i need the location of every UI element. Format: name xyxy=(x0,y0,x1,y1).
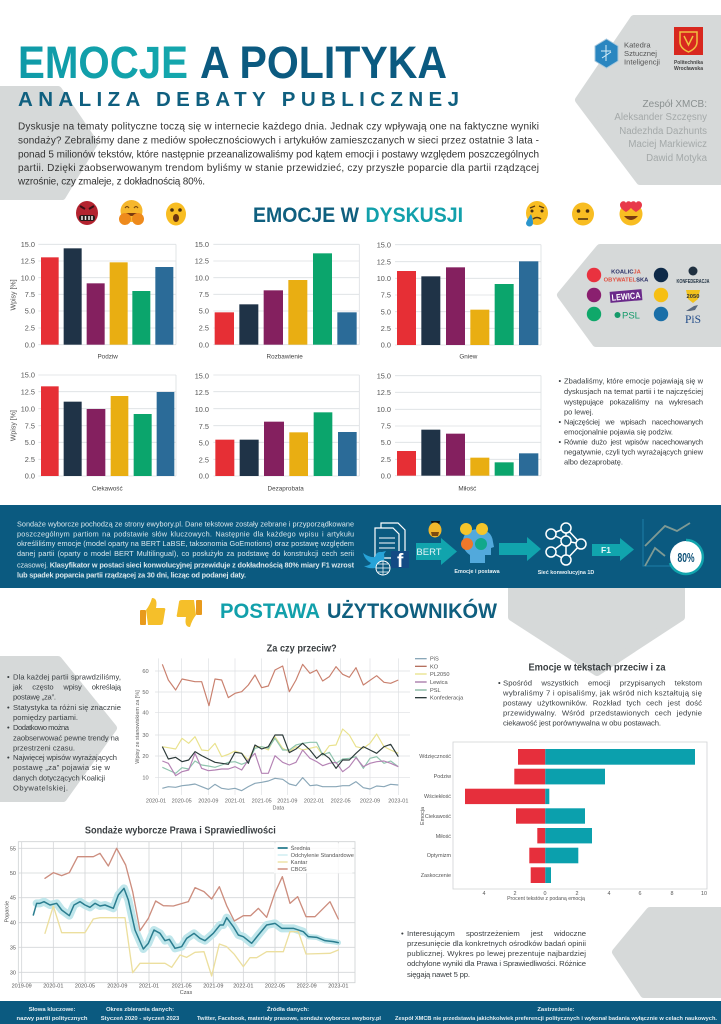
footer: sources xyxy=(197,1005,381,1022)
chart legend: Lewica xyxy=(430,680,448,686)
bar chart: emocje przeciw i za: Emocja xyxy=(420,807,426,825)
text: bullets on attitude: Dodatkowo można xyxy=(13,723,70,732)
arrow: to network xyxy=(499,537,541,561)
bar chart: Podziw: 5.0 xyxy=(25,307,35,316)
title: EMOCJE xyxy=(18,37,188,88)
text: bullets on emotions: • xyxy=(558,377,562,386)
bar chart: emocje przeciw i za: Podziw xyxy=(434,774,451,780)
bar chart: Ciekawość: Wpisy [%] xyxy=(10,410,17,441)
line chart: Za czy przeciw: 20 xyxy=(142,754,149,760)
line chart: sondaze PiS: 2023-01 xyxy=(328,984,348,990)
bar chart: Miłość: 5.0 xyxy=(381,438,391,447)
line chart: Za czy przeciw: 50 xyxy=(142,690,149,696)
icon: neutral emoji xyxy=(572,202,594,226)
text: bullets on emotions: Równie dużo jest wpisów nacechowanych xyxy=(564,438,703,447)
text: poll shift note: sięgają nawet 5 pp. xyxy=(407,970,470,979)
bar chart: emocje przeciw i za: Wdzięczność xyxy=(419,754,451,760)
logo: Koalicja Obywatelska: OBYWATELSKA xyxy=(604,278,649,284)
chart legend: Średnia xyxy=(291,844,311,852)
text: method description: poszczególnym partiom na podstawie słów kluczowych. Następnie dla każdego wpisu i artykułu xyxy=(17,530,354,539)
heading: Emocje w dyskusji: DYSKUSJI xyxy=(366,203,463,227)
bar chart: Dezaprobata xyxy=(195,371,359,493)
footer: keywords: Słowa kluczowe: xyxy=(29,1007,75,1013)
footer: period: Styczeń 2020 - styczeń 2023 xyxy=(101,1016,180,1022)
bar chart: Rozbawienie: 2.5 xyxy=(199,324,209,333)
bar chart: emocje przeciw i za: 0 xyxy=(544,891,546,897)
logo: Politechnika Wrocławska xyxy=(674,27,703,72)
bar chart: emocje przeciw i za: Procent tekstów z podaną emocją xyxy=(507,896,585,902)
line chart: Za czy przeciw: 10 xyxy=(142,775,149,781)
chart title: Za czy przeciw? xyxy=(267,643,337,654)
bar chart: Rozbawienie: 10.0 xyxy=(195,273,209,282)
text: bullets on attitude: zaobserwować pewne trendy na xyxy=(13,734,120,743)
line chart: sondaze PiS: 55 xyxy=(10,846,16,852)
bar chart: Ciekawość: 2.5 xyxy=(25,455,35,464)
title xyxy=(18,37,447,88)
icon: heart eyes emoji xyxy=(620,201,642,226)
badge: 80 percent: 80% xyxy=(678,550,695,565)
bar chart: Podziw: 10.0 xyxy=(21,273,35,282)
bar chart: Dezaprobata: 0.0 xyxy=(199,472,209,481)
bar chart: emocje przeciw i za: 8 xyxy=(670,891,674,897)
chart legend: PiS xyxy=(430,657,439,663)
line chart: Za czy przeciw: 2021-01 xyxy=(225,799,245,805)
badge: 80 percent xyxy=(670,540,703,574)
text: bullets on attitude: postawę „za”. xyxy=(13,693,56,702)
line chart: Za czy przeciw: 2020-05 xyxy=(172,799,192,805)
text: bullets on attitude: • xyxy=(7,723,10,732)
bar chart: Gniew: 10.0 xyxy=(377,274,391,283)
icon: head with emotions xyxy=(460,523,494,563)
line chart: Za czy przeciw: 2020-01 xyxy=(146,799,166,805)
text: method description: czasowej. Klasyfikator w postaci sieci konwolucyjnej przewiduje z dokładnością 80% miary F1 wzrost xyxy=(17,560,355,570)
bar chart: Miłość: 12.5 xyxy=(377,388,391,397)
bar chart: Miłość: 7.5 xyxy=(381,422,391,431)
line chart: sondaze PiS: 2020-09 xyxy=(107,984,127,990)
bar chart: Podziw: 15.0 xyxy=(21,240,35,249)
text: bullets on attitude xyxy=(7,673,122,793)
line chart: Za czy przeciw: 2022-01 xyxy=(304,799,324,805)
line chart: Za czy przeciw: 2022-05 xyxy=(331,799,351,805)
chart legend: Konfederacja xyxy=(430,696,464,702)
icon: convolutional network xyxy=(546,523,586,565)
icon: crying emoji xyxy=(526,201,548,226)
bar chart: Gniew xyxy=(377,240,541,361)
text: bullets on attitude: Statystyka ta różni się znacznie xyxy=(13,703,121,712)
logo: Politechnika Wrocławska: Wrocławska xyxy=(674,66,703,72)
line chart: sondaze PiS: 2022-05 xyxy=(265,984,285,990)
bar chart: Miłość: 2.5 xyxy=(381,455,391,464)
text: emotions in for and against: ciekawość jest porównywalna w obu postawach. xyxy=(503,719,661,728)
chart legend: PL2050 xyxy=(430,672,450,678)
bar chart: Rozbawienie: 15.0 xyxy=(195,240,209,249)
text: method description: danej partii (oparty o model BERT Multilingual), co posłużyło za podstawę do konstrukcji cech serii xyxy=(17,549,354,558)
line chart: sondaze PiS: 2022-01 xyxy=(233,984,253,990)
bar chart: Podziw xyxy=(10,240,176,361)
text: bullets on emotions: Zbadaliśmy, które emocje pojawiają się w xyxy=(564,377,704,386)
bar chart: Miłość: 0.0 xyxy=(381,471,391,480)
icon: BERT figure xyxy=(428,521,442,538)
line chart: sondaze PiS: 2022-09 xyxy=(297,984,317,990)
icon: hugging emoji xyxy=(119,200,144,225)
text: emotions in for and against xyxy=(498,679,702,728)
intro paragraph: partii. Dzięki zaobserwowanym trendom byliśmy w stanie przewidzieć, czy przyszłe poparcie dla partii rządzącej xyxy=(18,163,539,174)
text: bullets on emotions: po lewej. xyxy=(564,408,594,416)
footer: disclaimer: Zespół XMCB nie przedstawia jakichkolwiek preferencji politycznych i wykonał badania wyłącznie w celach naukowych. xyxy=(395,1016,717,1022)
chart legend: Kantar xyxy=(291,860,307,866)
line chart: sondaze PiS: 50 xyxy=(10,871,16,877)
icon: surprised emoji xyxy=(166,202,186,226)
team names: Nadezhda Dazhunts xyxy=(619,126,707,137)
line chart: Za czy przeciw: 2023-01 xyxy=(388,799,408,805)
heading: Emocje w dyskusji xyxy=(253,203,463,227)
text: method description xyxy=(17,520,355,580)
bar chart: Gniew: 7.5 xyxy=(381,291,391,300)
bar chart: emocje przeciw i za: 2 xyxy=(514,891,516,897)
line chart: sondaze PiS: 30 xyxy=(10,970,16,976)
bar charts: right column xyxy=(377,240,541,493)
line chart: sondaze PiS: 45 xyxy=(10,896,16,902)
line chart: Za czy przeciw: 2020-09 xyxy=(198,799,218,805)
team names xyxy=(614,99,708,164)
panel: party legend xyxy=(561,248,721,343)
line chart: sondaze PiS xyxy=(5,826,355,996)
team names: Dawid Motyka xyxy=(646,153,708,164)
icon: angry emoji xyxy=(76,201,98,225)
footer: period: Okres zbierania danych: xyxy=(106,1007,174,1013)
text: poll shift note: publicznej. Wykres po lewej prezentuje najbardziej xyxy=(407,949,586,958)
logo: Polska 2050 xyxy=(686,290,700,303)
bar chart: Ciekawość: 0.0 xyxy=(25,472,35,481)
panel: top right grey arrow xyxy=(579,19,721,181)
bar chart: emocje przeciw i za: Ciekawość xyxy=(425,814,451,820)
bar chart: Podziw: Wpisy [%] xyxy=(10,279,17,311)
text: bullets on attitude: Najwięcej wpisów wyrażających xyxy=(13,753,117,762)
text: bullets on attitude: danych dotyczących Koalicji xyxy=(13,774,105,783)
heading: Emocje w dyskusji: EMOCJE W xyxy=(253,203,360,227)
bar chart: Ciekawość: 10.0 xyxy=(21,404,35,413)
caption: siec konwolucyjna: Sieć konwolucyjna 1D xyxy=(538,570,594,576)
logo: Politechnika Wrocławska: Politechnika xyxy=(674,60,703,66)
footer bar xyxy=(0,1001,721,1024)
bar chart: Dezaprobata: 5.0 xyxy=(199,439,209,448)
chart title: Sondaże wyborcze Prawa i Sprawiedliwości xyxy=(85,826,276,837)
bar chart: emocje przeciw i za: 2 xyxy=(576,891,578,897)
chart legend xyxy=(274,843,354,873)
bar chart: Podziw: 7.5 xyxy=(25,290,35,299)
arrow: F1 xyxy=(592,538,634,561)
line chart: Za czy przeciw xyxy=(135,643,464,811)
bar chart: Podziw: 2.5 xyxy=(25,324,35,333)
logo: Katedra Sztucznej Inteligencji xyxy=(595,39,660,68)
text: emotions in for and against: przewidywalny. Wśród przedstawionych cech jedynie xyxy=(503,709,702,718)
bar charts: left columns xyxy=(10,240,359,493)
arrow: F1: F1 xyxy=(601,545,611,555)
panel: left grey arrow xyxy=(0,660,113,798)
logo: Konfederacja xyxy=(676,266,710,285)
bar chart: Ciekawość: Ciekawość xyxy=(92,486,123,493)
bar chart: emocje przeciw i za: 6 xyxy=(638,891,642,897)
line chart: Za czy przeciw: 2021-09 xyxy=(277,799,297,805)
text: bullets on emotions: dyskusjach na temat partii i te najczęściej xyxy=(564,387,703,396)
line chart: Za czy przeciw: 2022-09 xyxy=(360,799,380,805)
bar chart: Dezaprobata: 2.5 xyxy=(199,456,209,465)
text: bullets on emotions: • xyxy=(558,438,562,447)
bar chart: Gniew: 12.5 xyxy=(377,257,391,266)
bar chart: Gniew: 5.0 xyxy=(381,307,391,316)
bar chart: Rozbawienie: Rozbawienie xyxy=(267,354,303,361)
logo: PiS: PiS xyxy=(685,314,701,326)
text: bullets on emotions xyxy=(558,377,704,466)
bar chart: emocje przeciw i za xyxy=(419,742,707,902)
chart legend: Odchylenie Standardowe xyxy=(291,853,354,859)
team names: Zespół XMCB: xyxy=(643,99,707,110)
line chart: Za czy przeciw: Wpisy ze stanowiskiem za [%] xyxy=(135,690,141,764)
logo: Katedra Sztucznej Inteligencji: Sztucznej xyxy=(624,49,657,58)
footer: keywords: nazwy partii politycznych xyxy=(16,1016,88,1022)
bar chart: Gniew: 15.0 xyxy=(377,240,391,249)
line chart: sondaze PiS: 2020-01 xyxy=(43,984,63,990)
line chart: sondaze PiS: 2021-01 xyxy=(139,984,159,990)
panel: bottom right grey arrow xyxy=(616,911,721,994)
logo: Koalicja Obywatelska: KOALICJA xyxy=(611,270,642,276)
heading: Emocje w tekstach przeciw i za: Emocje w tekstach przeciw i za xyxy=(528,662,666,674)
bar chart: Dezaprobata: 12.5 xyxy=(195,388,209,397)
text: bullets on emotions: • xyxy=(558,418,562,427)
line chart: sondaze PiS: 2019-09 xyxy=(12,984,32,990)
panel: method banner xyxy=(0,505,721,588)
bar chart: Rozbawienie: 5.0 xyxy=(199,307,209,316)
bar chart: Gniew: 0.0 xyxy=(381,341,391,350)
text: bullets on emotions: negatywnie, czyli tych wyrażających gniew xyxy=(564,448,704,456)
subtitle: ANALIZA DEBATY PUBLICZNEJ xyxy=(18,88,459,111)
bar chart: Miłość: Miłość xyxy=(458,486,476,493)
text: bullets on attitude: jak często wpisy określają xyxy=(12,683,122,692)
text: bullets on attitude: pomiędzy partiami. xyxy=(13,713,78,722)
footer: sources: Twitter, Facebook, materiały prasowe, sondaże wyborcze ewybory.pl xyxy=(197,1016,381,1022)
icon: thumb up xyxy=(140,598,165,625)
text: bullets on attitude: przestrzeni czasu. xyxy=(13,744,75,753)
line chart: Za czy przeciw: Data xyxy=(273,805,285,811)
text: bullets on attitude: Dla każdej partii sprawdziliśmy, xyxy=(13,673,121,682)
bar chart: Ciekawość: 12.5 xyxy=(21,387,35,396)
line chart: sondaze PiS: Poparcie xyxy=(5,901,11,922)
bar chart: Ciekawość xyxy=(10,371,176,493)
text: emotions in for and against: Spośród wszystkich emocji przypisanych tekstom xyxy=(503,679,702,688)
bar chart: Ciekawość: 15.0 xyxy=(21,371,35,380)
text: bullets on emotions: emocjonalnie pojawia się podziw. xyxy=(564,428,673,437)
bar chart: Gniew: 2.5 xyxy=(381,324,391,333)
footer: sources: Źródła danych: xyxy=(267,1005,309,1013)
title: A POLITYKA xyxy=(200,37,447,88)
logo: PiS xyxy=(685,305,701,326)
line chart: sondaze PiS: 2021-09 xyxy=(203,984,223,990)
line chart: sondaze PiS: 35 xyxy=(10,945,16,951)
bar chart: emocje przeciw i za: Miłość xyxy=(436,834,451,840)
bar chart: Ciekawość: 7.5 xyxy=(25,421,35,430)
bar chart: Gniew: Gniew xyxy=(459,354,478,361)
text: method description: lub spadek poparcia partii rządzącej za 30 dni, licząc od podanej daty. xyxy=(17,571,246,580)
logo: Katedra Sztucznej Inteligencji: Katedra xyxy=(624,40,651,50)
chart icon with trend lines xyxy=(643,519,690,566)
chart legend: PSL xyxy=(430,688,441,694)
logo: Koalicja Obywatelska xyxy=(604,270,649,284)
bar chart: emocje przeciw i za: 4 xyxy=(482,891,486,897)
icon: thumb down xyxy=(177,600,202,627)
bar chart: Dezaprobata: 7.5 xyxy=(199,422,209,431)
intro paragraph: ponad 5 milionów tekstów, które następnie przeanalizowaliśmy pod kątem emocji i postawy względem poszczególnych xyxy=(18,149,539,160)
team names: Aleksander Szczęsny xyxy=(614,112,707,123)
bar chart: emocje przeciw i za: Wściekłość xyxy=(424,794,451,800)
heading: Postawa uzytkownikow: UŻYTKOWNIKÓW xyxy=(327,598,498,623)
intro paragraph xyxy=(17,122,539,188)
bar chart: Dezaprobata: Dezaprobata xyxy=(268,486,304,493)
footer: keywords xyxy=(16,1007,88,1022)
line chart: sondaze PiS: Czas xyxy=(180,990,193,996)
bar chart: Podziw: 12.5 xyxy=(21,257,35,266)
text: bullets on emotions: występujące pokazaliśmy na wykresach xyxy=(563,398,703,406)
team names: Maciej Markiewicz xyxy=(628,139,707,150)
bar chart: Podziw: 0.0 xyxy=(25,340,35,349)
line chart: Za czy przeciw: 60 xyxy=(142,669,149,675)
text: poll shift note: odchylone wyniki dla Prawa i Sprawiedliwości. Różnice xyxy=(407,959,586,968)
bar chart: Dezaprobata: 15.0 xyxy=(195,371,209,380)
text: poll shift note xyxy=(401,929,586,979)
text: bullets on attitude: • xyxy=(7,703,10,712)
bar chart: Rozbawienie: 0.0 xyxy=(199,340,209,349)
text: emotions in for and against: • xyxy=(498,679,501,688)
footer: disclaimer xyxy=(395,1007,717,1022)
text: bullets on attitude: • xyxy=(7,753,10,762)
text: bullets on attitude: Obywatelskiej. xyxy=(13,784,68,793)
footer: disclaimer: Zastrzeżenie: xyxy=(537,1007,575,1013)
text: bullets on emotions: Najczęściej we wpisach nacechowanych xyxy=(564,418,703,427)
chart legend: CBOS xyxy=(291,867,307,873)
logo: Konfederacja: KONFEDERACJA xyxy=(676,279,710,285)
icon: documents and social media: f xyxy=(397,551,404,572)
heading: Postawa uzytkownikow: POSTAWA xyxy=(220,599,320,623)
bar chart: Rozbawienie: 12.5 xyxy=(195,257,209,266)
panel: grey arrow down xyxy=(512,584,681,672)
chart legend xyxy=(415,657,464,702)
footer: period xyxy=(101,1007,180,1022)
bar chart: Dezaprobata: 10.0 xyxy=(195,405,209,414)
bar chart: Podziw: Podziw xyxy=(97,354,118,361)
logo: Polska 2050: 2050 xyxy=(687,294,699,300)
arrow: BERT: BERT xyxy=(416,547,442,558)
line chart: sondaze PiS: 2021-05 xyxy=(172,984,192,990)
chart legend: KO xyxy=(430,664,439,670)
text: poll shift note: przesunięcie dla konkretnych ośrodków badań opinii xyxy=(407,939,586,948)
bar chart: Rozbawienie: 7.5 xyxy=(199,290,209,299)
text: bullets on emotions: albo dezaprobatę. xyxy=(564,458,623,466)
panel: top left grey arrow xyxy=(0,90,94,196)
line chart: sondaze PiS: 40 xyxy=(10,921,16,927)
text: bullets on attitude: • xyxy=(7,673,10,682)
bar chart: Miłość xyxy=(377,371,541,493)
heading: Postawa uzytkownikow xyxy=(220,598,498,623)
line chart: Za czy przeciw: 30 xyxy=(142,733,149,739)
text: poll shift note: • xyxy=(401,929,404,938)
bar chart: emocje przeciw i za: 10 xyxy=(701,891,707,897)
icon: documents and social media xyxy=(363,523,409,575)
line chart: Za czy przeciw: 40 xyxy=(142,711,149,717)
bar chart: emocje przeciw i za: Zaskoczenie xyxy=(421,873,451,879)
text: method description: określiliśmy emocje (model oparty na BERT LaBSE, taksonomia GoEmotions) oraz postawę względem xyxy=(17,539,354,548)
bar chart: Rozbawienie xyxy=(195,240,359,361)
bar chart: Miłość: 10.0 xyxy=(377,405,391,414)
logo: PSL: PSL xyxy=(622,310,640,322)
line chart: Za czy przeciw: 2021-05 xyxy=(252,799,272,805)
intro paragraph: Dyskusje na tematy polityczne toczą się w internecie każdego dnia. Jednak czy wpływają one na faktyczne wyniki xyxy=(18,122,539,132)
logo: Lewica: LEWICA xyxy=(611,290,641,303)
bar chart: emocje przeciw i za: 4 xyxy=(608,891,610,897)
text: emotions in for and against: postawy użytkowników. Rozkład tych cech jest dość xyxy=(503,699,702,708)
bar chart: emocje przeciw i za: Optymizm xyxy=(427,853,452,859)
logo: Katedra Sztucznej Inteligencji: Inteligencji xyxy=(624,58,660,66)
text: poll shift note: Interesującym spostrzeżeniem jest widoczne xyxy=(407,929,586,938)
line chart: sondaze PiS: 2020-05 xyxy=(75,984,95,990)
text: emotions in for and against: wybraliśmy 7 i opisaliśmy, jak wśród nich kształtują się xyxy=(502,689,702,698)
bar chart: Ciekawość: 5.0 xyxy=(25,438,35,447)
arrow: BERT xyxy=(416,538,457,565)
intro paragraph: sondaży? Zebraliśmy dane z mediów społecznościowych i artykułów zamieszczanych w sieci przez ostatnie 3 lata - xyxy=(18,135,539,146)
intro paragraph: wzrośnie, czy zmaleje, z dokładnością 80%. xyxy=(17,176,205,188)
text: method description: Sondaże wyborcze pochodzą ze strony ewybory.pl. Dane tekstowe zostały zebrane i przyporządkowane xyxy=(17,520,354,529)
text: bullets on attitude: postawę „za” pojawia się w xyxy=(13,763,111,772)
caption: emocje i postawa: Emocje i postawa xyxy=(454,569,501,575)
bar chart: Miłość: 15.0 xyxy=(377,371,391,380)
